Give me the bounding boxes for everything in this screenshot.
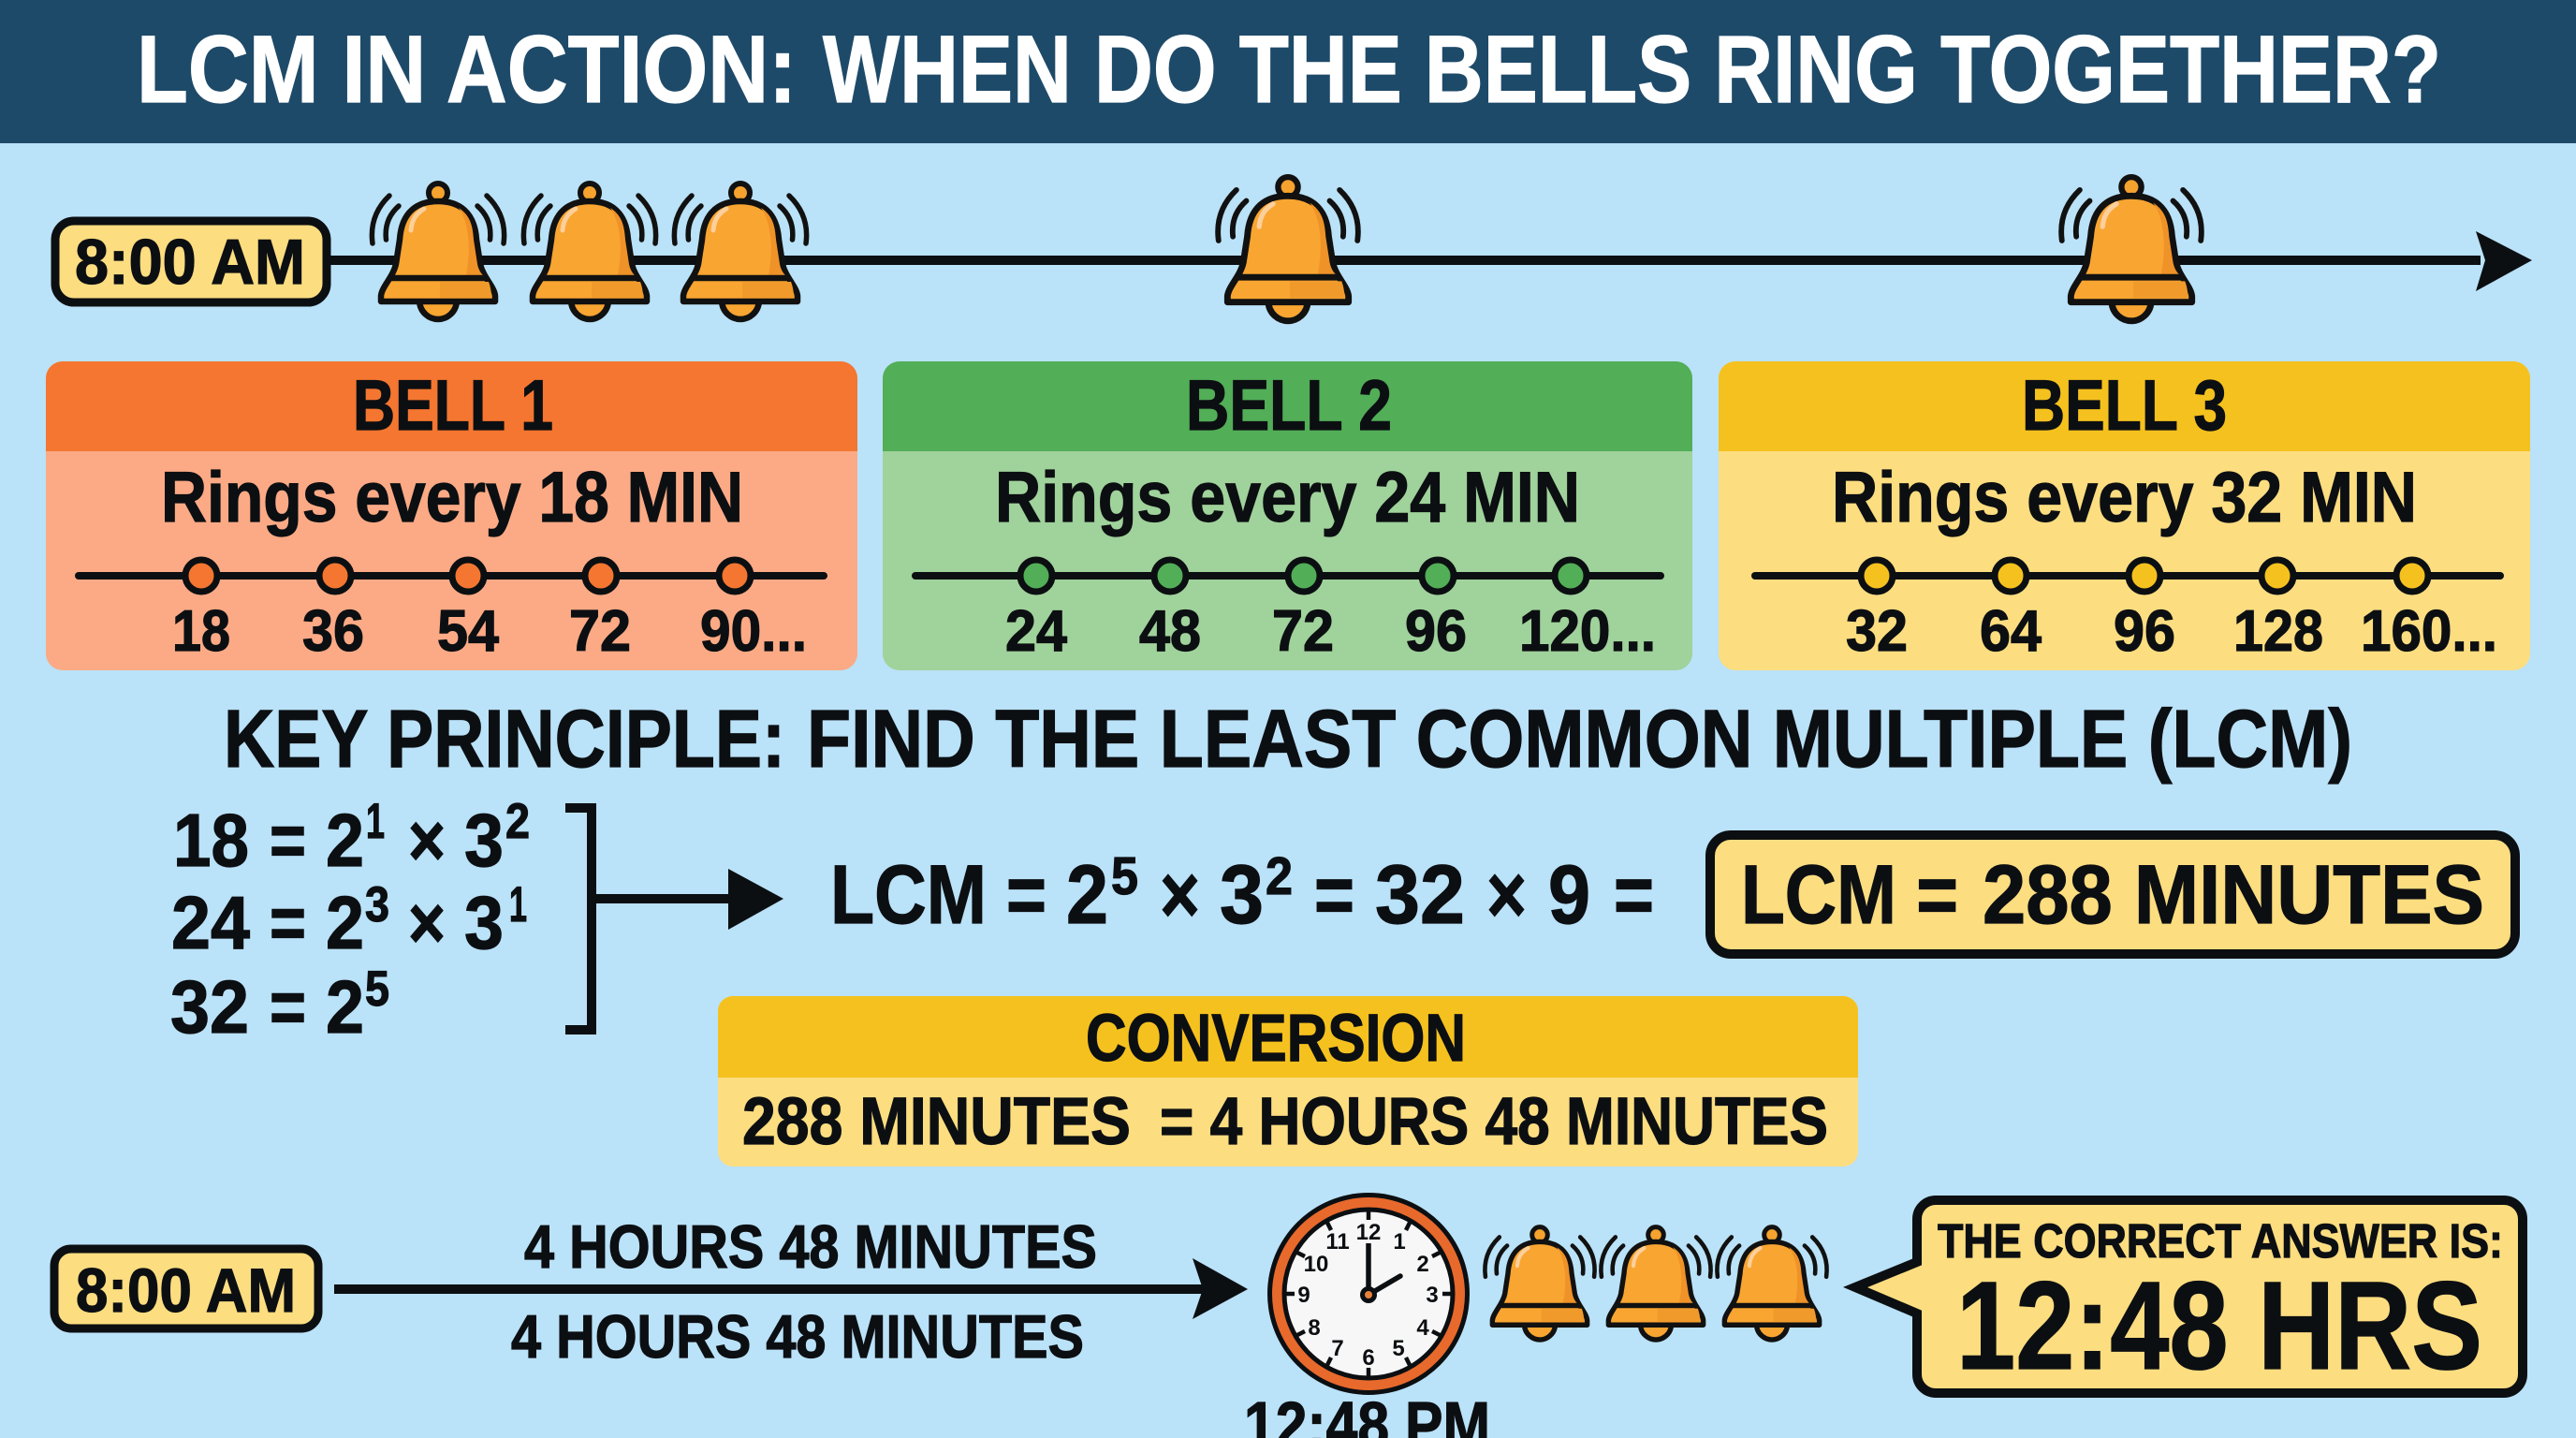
icon: bell	[2061, 177, 2202, 321]
factorization of 32: 5	[365, 961, 389, 1017]
interval text: Rings every 24 MIN	[995, 458, 1580, 537]
icon: clock: 11	[1325, 1229, 1350, 1255]
icon: clock: 5	[1392, 1336, 1405, 1361]
LCM formula: 9	[1548, 847, 1590, 941]
factorization of 24: ×	[408, 881, 446, 964]
multiples number line	[912, 560, 1664, 664]
LCM result box	[1710, 835, 2515, 954]
icon: clock: 9	[1297, 1283, 1310, 1308]
LCM result box: 288 MINUTES	[1983, 847, 2484, 941]
heading: BELL 2	[1186, 366, 1392, 446]
multiples number line: 90...	[700, 599, 807, 664]
multiples number line: 96	[2114, 599, 2175, 664]
duration arrow	[334, 1258, 1248, 1319]
timeline arrow	[328, 231, 2532, 291]
panel: conversion	[718, 996, 1858, 1167]
icon: clock: 1	[1393, 1229, 1406, 1255]
interval text: Rings every 18 MIN	[161, 458, 743, 537]
LCM result box: LCM =	[1741, 847, 1958, 941]
icon: clock: 10	[1304, 1252, 1328, 1277]
icon: clock: 7	[1331, 1336, 1344, 1361]
factorization of 24: 1	[509, 877, 527, 932]
multiples number line: 72	[569, 599, 631, 664]
LCM formula: ×	[1160, 847, 1200, 941]
top timeline	[55, 177, 2532, 321]
icon: clock: 8	[1308, 1315, 1321, 1341]
icon: bell	[372, 183, 505, 319]
LCM formula: ×	[1486, 847, 1527, 941]
LCM formula: 5	[1111, 846, 1138, 906]
factorization of 18: =	[270, 799, 306, 882]
conversion statement	[742, 1085, 1828, 1159]
multiples number line	[1751, 560, 2504, 664]
title banner	[0, 0, 2576, 143]
panel: bell 2	[883, 361, 1692, 670]
title	[137, 16, 2441, 123]
icon: bell	[1218, 177, 1358, 321]
start time label: 8:00 AM	[76, 1255, 296, 1325]
interval text: Rings every 32 MIN	[1832, 458, 2417, 537]
answer: 12:48 HRS	[1956, 1256, 2482, 1396]
icon: clock: 3	[1426, 1283, 1439, 1308]
panel: bell 3	[1719, 361, 2530, 670]
heading: key principle: FIND THE LEAST COMMON MULTIPLE (LCM)	[807, 694, 2352, 785]
duration label above: 4 HOURS 48 MINUTES	[524, 1212, 1097, 1281]
multiples number line: 64	[1980, 599, 2042, 664]
multiples number line: 160...	[2361, 599, 2497, 664]
duration label below: 4 HOURS 48 MINUTES	[511, 1302, 1084, 1371]
icon: clock: 4	[1416, 1315, 1429, 1341]
LCM formula: 32	[1375, 847, 1465, 941]
multiples number line: 120...	[1519, 599, 1656, 664]
factorization of 32: 2	[326, 965, 364, 1049]
factorization of 18: 2	[326, 799, 364, 882]
LCM formula: =	[1614, 847, 1654, 941]
factorization of 18: 2	[505, 794, 530, 849]
conversion statement: 288 MINUTES	[742, 1085, 1131, 1159]
LCM formula: =	[1314, 847, 1354, 941]
heading: BELL 1	[353, 366, 553, 446]
bottom timeline	[54, 1212, 1248, 1371]
factorization of 18: 1	[366, 794, 385, 849]
factorization of 18	[173, 794, 530, 882]
icon: clock: 12	[1356, 1220, 1381, 1245]
callout caption: THE CORRECT ANSWER IS:	[1938, 1214, 2503, 1268]
icon: clock: 6	[1362, 1345, 1375, 1371]
icon: bell	[1717, 1227, 1827, 1340]
start time label: 8:00 AM	[75, 227, 305, 298]
callout: correct answer	[1855, 1200, 2523, 1396]
multiples number line: 54	[437, 599, 499, 664]
factorization of 32: =	[270, 965, 306, 1049]
LCM formula: LCM	[830, 847, 987, 941]
conversion statement: = 4 HOURS 48 MINUTES	[1160, 1085, 1828, 1159]
heading: CONVERSION	[1086, 1002, 1466, 1076]
heading: key principle: KEY PRINCIPLE:	[224, 694, 785, 785]
icon: clock	[1267, 1193, 1470, 1395]
multiples number line: 72	[1272, 599, 1334, 664]
factorization of 24: 2	[326, 881, 364, 964]
factorization of 24: 3	[365, 877, 389, 932]
prime factorizations	[170, 794, 530, 1049]
multiples number line: 18	[172, 599, 230, 664]
icon: bell	[1601, 1227, 1711, 1340]
multiples number line: 32	[1846, 599, 1908, 664]
factorization of 18: 18	[173, 799, 249, 882]
LCM formula: 3	[1220, 847, 1264, 941]
factorization of 18: 3	[464, 799, 504, 882]
factorization of 24	[171, 877, 527, 964]
icon: bell	[1485, 1227, 1595, 1340]
bracket and arrow	[565, 808, 783, 1030]
factorization of 32	[170, 961, 389, 1049]
heading: key principle	[224, 694, 2352, 785]
icon: bell	[674, 183, 807, 319]
factorization of 32: 32	[170, 965, 249, 1049]
LCM formula: =	[1006, 847, 1046, 941]
factorization of 24: 3	[464, 881, 504, 964]
factorization of 18: ×	[408, 799, 446, 882]
multiples number line: 48	[1139, 599, 1201, 664]
factorization of 24: =	[270, 881, 306, 964]
factorization of 24: 24	[171, 881, 250, 964]
icon: clock: 2	[1416, 1252, 1429, 1277]
icon: bell	[523, 183, 656, 319]
multiples number line: 96	[1405, 599, 1467, 664]
heading: BELL 3	[2022, 366, 2227, 446]
multiples number line: 36	[302, 599, 364, 664]
LCM formula: 2	[1066, 847, 1108, 941]
panel: bell 1	[46, 361, 857, 670]
multiples number line	[75, 560, 827, 664]
multiples number line: 24	[1005, 599, 1067, 664]
LCM formula: 2	[1266, 846, 1293, 906]
title: LCM IN ACTION:	[137, 16, 797, 123]
multiples number line: 128	[2233, 599, 2323, 664]
LCM formula	[830, 846, 1654, 941]
